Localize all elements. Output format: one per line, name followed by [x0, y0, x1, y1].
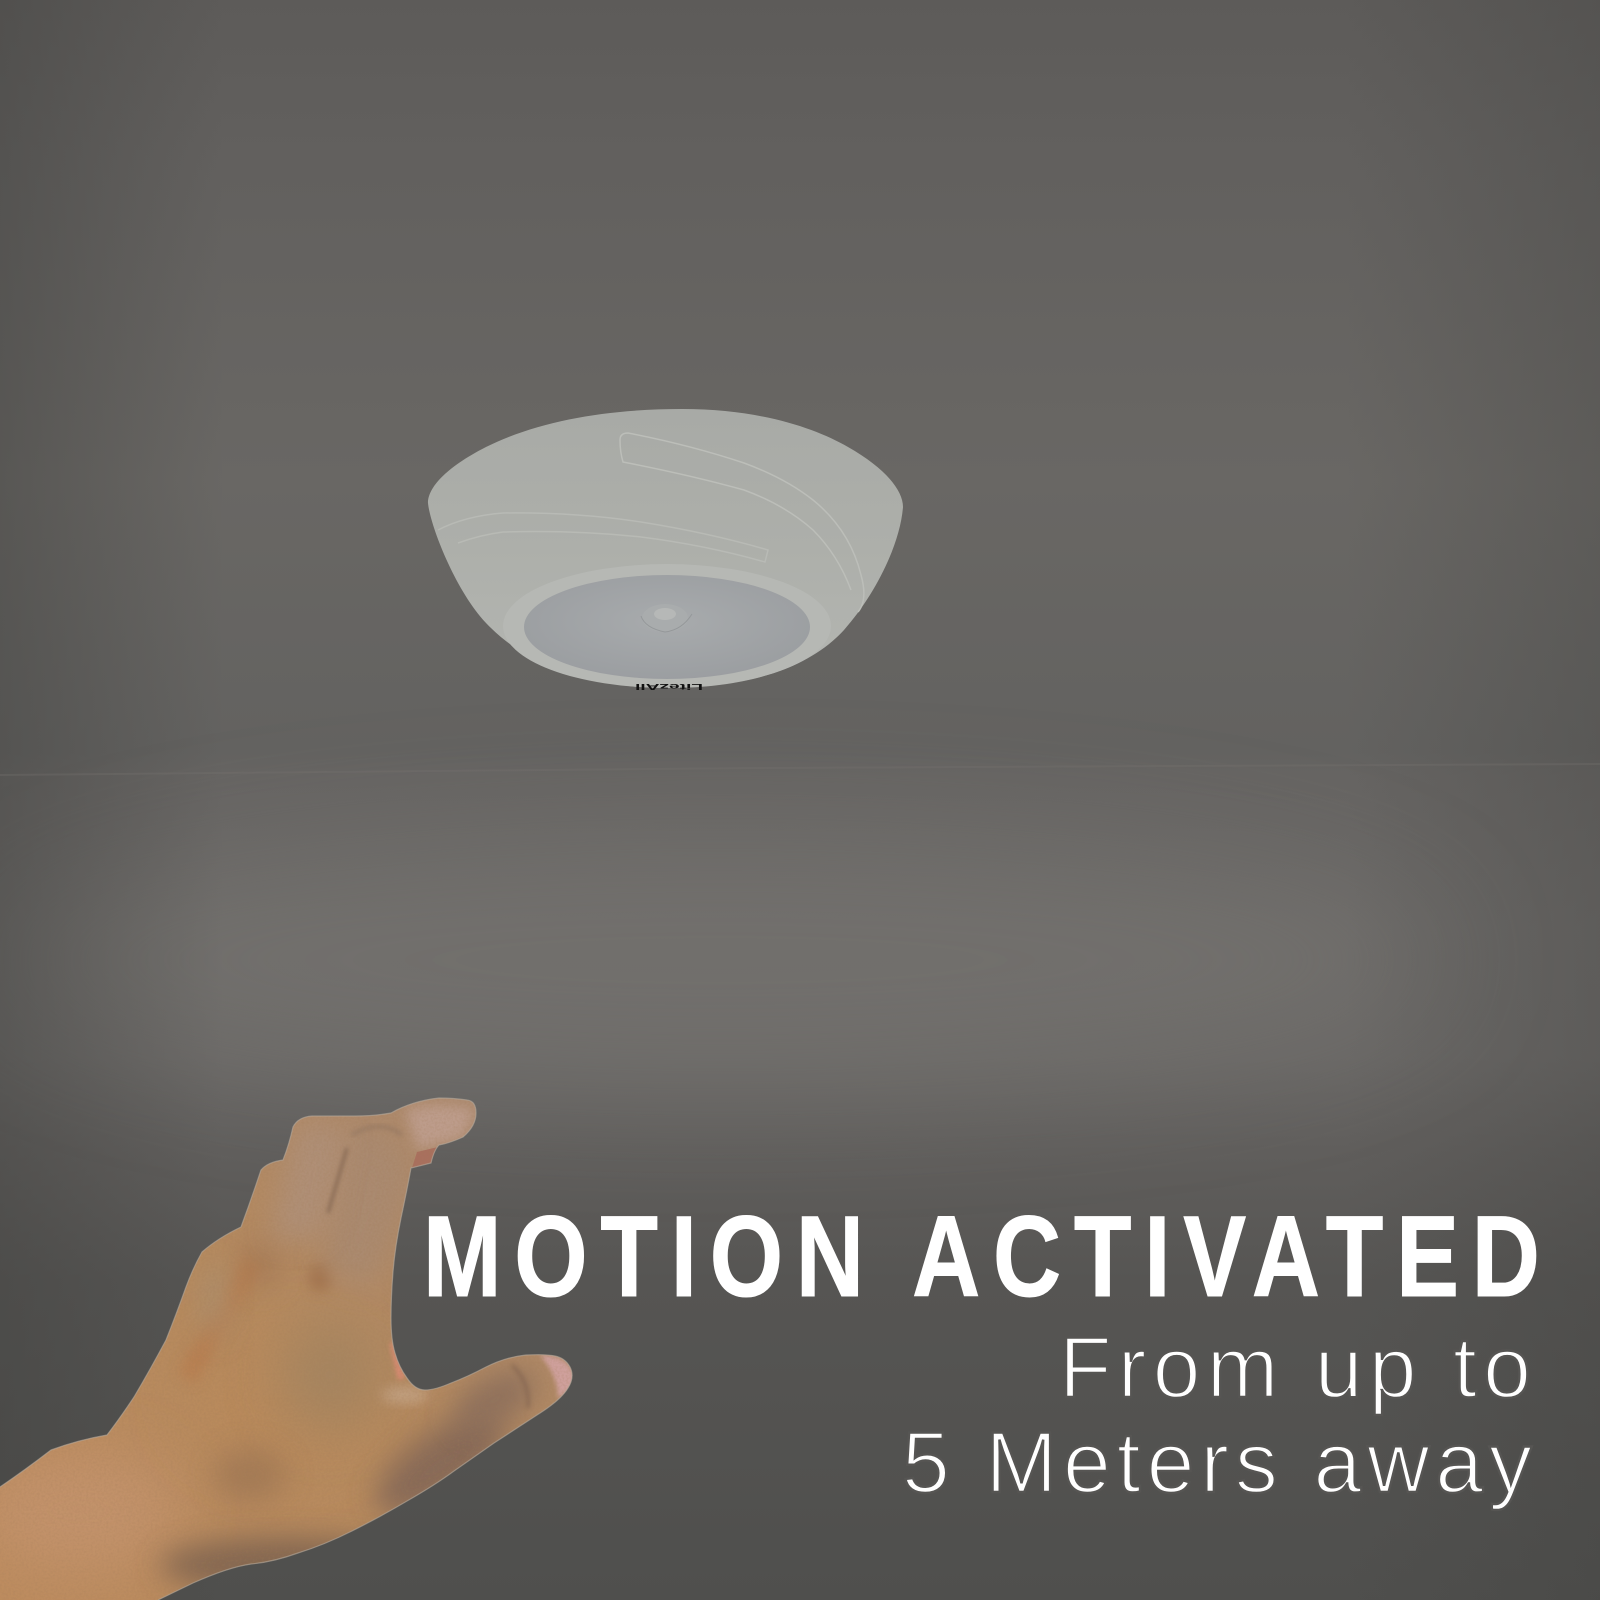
subheading: range — [902, 1320, 1532, 1511]
hand reaching upward — [0, 1090, 590, 1600]
motion sensor — [641, 604, 692, 632]
skin texture — [400, 1110, 571, 1393]
hand shading — [0, 1105, 575, 1593]
brand label: LitezAll — [635, 682, 703, 691]
product: motion sensor ceiling light — [428, 409, 903, 691]
lens ring — [503, 564, 831, 688]
lamp body — [428, 409, 903, 688]
hand rim highlight — [0, 1098, 572, 1600]
side tab ridge — [438, 513, 768, 562]
line one: From up to — [1059, 1320, 1531, 1416]
line two: 5 Meters away — [902, 1415, 1532, 1511]
lens — [524, 575, 810, 679]
headline: motion activated: MOTION ACTIVATED — [423, 1193, 1540, 1321]
upper tab ridge — [620, 433, 864, 612]
